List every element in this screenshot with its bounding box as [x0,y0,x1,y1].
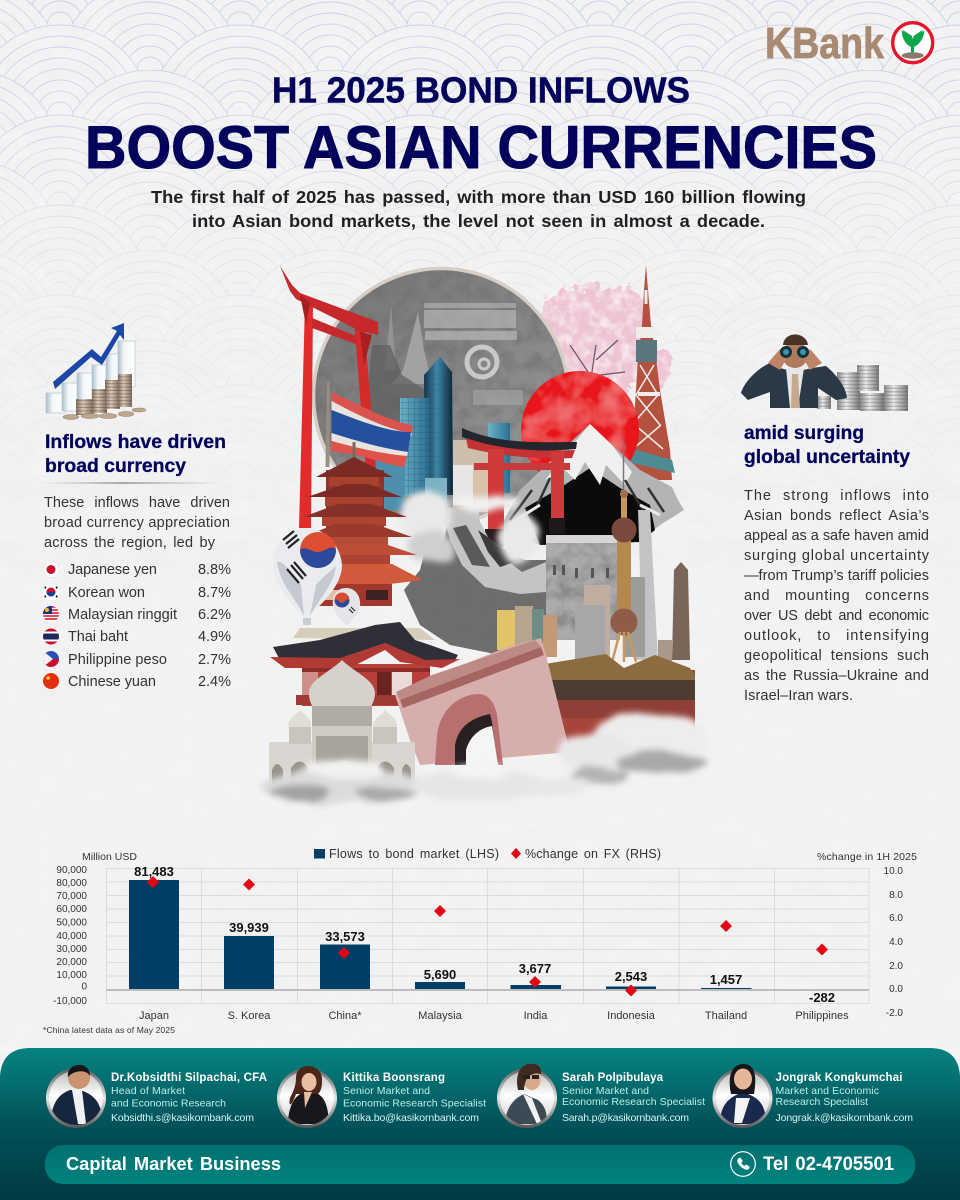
contact bar [45,1145,915,1184]
right axis labels: 2.0 [889,961,903,972]
heading: inflows have driven broad currency: Inflows have driven [45,431,226,453]
body text: as the Russia–Ukraine and [744,668,929,684]
bar value labels: 33,573 [325,929,365,944]
axis titles: Million USD [82,851,137,863]
bars: flows to bond market [129,880,847,991]
right axis labels: -2.0 [886,1008,903,1019]
item: Korean won: 8.7% [198,585,231,601]
contact: Kittika: Kittika.bo@kasikornbank.com [343,1112,479,1124]
left axis labels: -10,000 [53,996,87,1007]
Korean balloons [273,528,360,625]
category labels: China* [328,1010,362,1022]
category labels: Malaysia [418,1010,463,1022]
category labels: Philippines [795,1010,849,1022]
left axis labels [53,865,87,1007]
logo: KBank [765,19,933,68]
body text: across the region, led by [44,535,216,551]
left axis labels: 30,000 [56,944,87,955]
right axis labels: 4.0 [889,937,903,948]
category labels: Indonesia [607,1010,656,1022]
Thai flag [326,382,413,467]
small balloon [333,588,360,625]
item: Malaysian ringgit: 6.2% [198,607,231,623]
Taj Mahal [269,660,415,788]
logo wordmark: KBank [765,19,884,68]
icon: phone [731,1152,755,1176]
right axis labels: 8.0 [889,890,903,901]
label: Capital Market Business: Capital Market Business [66,1154,281,1174]
item: Thai baht [43,628,231,645]
body text: geopolitical tensions such [744,648,929,664]
item: Korean won: Korean won [68,585,145,601]
left axis labels: 70,000 [56,891,87,902]
Shanghai skyline [497,440,690,675]
collage: Asian landmarks [263,265,708,803]
body text [744,488,930,704]
bar value labels: 3,677 [519,961,551,976]
legend: Flows to bond market (LHS) [329,847,499,861]
body text: outlook, to intensifying [744,628,929,644]
body text: broad currency appreciation [44,515,230,531]
currency list [43,561,231,690]
Great Wall [404,506,620,655]
Tokyo tower [628,265,675,480]
left axis labels: 40,000 [56,931,87,942]
contact: Kittika: Kittika Boonsrang [343,1072,445,1084]
contact: Jongrak [712,1064,913,1128]
icon: businessman with binoculars and coins [741,334,908,411]
diamonds: FX percent change [147,876,828,996]
giant swing [280,266,378,528]
axis titles [82,851,917,863]
heading: inflows have driven broad currency: broad currency [45,455,186,477]
contact: Jongrak: Research Specialist [776,1096,868,1108]
left axis labels: 60,000 [56,904,87,915]
contact: Kobsidthi [46,1065,267,1128]
Mount Fuji [500,424,684,545]
bar value labels [134,864,835,1005]
left axis labels: 0 [81,982,87,992]
contact: Jongrak: Jongrak Kongkumchai [776,1072,902,1084]
body text [44,495,230,551]
contact: Kobsidthi: Dr.Kobsidthi Silpachai, CFA [111,1072,267,1084]
axis titles: %change in 1H 2025 [817,851,917,863]
title line 2: BOOST ASIAN CURRENCIES [85,114,877,181]
heading: amid surging [744,422,864,444]
contact: Kittika: Economic Research Specialist [343,1098,486,1110]
heading: inflows have driven broad currency [45,431,226,477]
panel: inflows and currency list [42,431,231,690]
subtitle: The first half of 2025 has passed, with more than USD 160 billion flowing [151,187,806,207]
item: Philippine peso [43,651,231,668]
category labels: Japan [139,1010,169,1022]
big balloon [273,528,342,625]
body text: appeal as a safe haven amid [744,528,929,544]
subtitle: into Asian bond markets, the level not seen in almost a decade. [192,211,765,231]
left axis labels: 90,000 [56,865,87,876]
legend: %change on FX (RHS) [525,847,661,861]
contact: Sarah: Sarah.p@kasikornbank.com [562,1112,689,1124]
label: telephone number: Tel 02-4705501 [763,1153,894,1175]
body text: —from Trump’s tariff policies [744,568,929,584]
body text: The strong inflows into [744,488,929,504]
heading [744,422,910,468]
body text: These inflows have driven [44,495,230,511]
bar value labels: 2,543 [615,969,647,984]
item: Philippine peso: 2.7% [198,652,231,668]
item: Malaysian ringgit: Malaysian ringgit [68,607,177,623]
contact: Jongrak: Jongrak.k@kasikornbank.com [776,1112,913,1124]
item: Japanese yen: Japanese yen [68,562,157,578]
item: Japanese yen [43,561,231,578]
item: Chinese yuan [43,673,231,690]
torii gate [462,428,577,547]
bar value labels: -282 [809,990,835,1005]
clouds around wall [399,492,538,562]
item: Thai baht: 4.9% [198,629,231,645]
category labels: Thailand [705,1010,747,1022]
body text: Israel–Iran wars. [744,688,853,704]
chart grid [106,868,869,1004]
Forbidden City [545,654,695,750]
left axis labels: 80,000 [56,878,87,889]
contact: Kittika [277,1066,486,1128]
body text: Asian bonds reflect Asia’s [744,508,929,524]
footnote: *China latest data as of May 2025 [43,1025,175,1035]
skyscrapers [375,357,510,512]
left axis labels: 10,000 [56,970,87,981]
item: Chinese yuan: 2.4% [198,674,231,690]
contact: Sarah: Sarah Polpibulaya [562,1072,664,1084]
category labels: S. Korea [228,1010,271,1022]
bar value labels: 81,483 [134,864,174,879]
category labels: India [524,1010,548,1022]
logo emblem: green leaves in red ring [893,23,933,63]
item: Korean won [43,584,231,601]
contact: Sarah: Economic Research Specialist [562,1096,705,1108]
item: Japanese yen: 8.8% [198,562,231,578]
left axis labels: 50,000 [56,918,87,928]
right axis labels [884,866,903,1019]
right axis labels: 6.0 [889,913,903,924]
category labels [139,1010,849,1022]
Korean palace [270,622,460,706]
panel: amid surging global uncertainty [744,422,930,704]
right axis labels: 10.0 [884,866,903,877]
body text: and mounting concerns [744,588,929,604]
contact: Kittika: Senior Market and [343,1085,430,1097]
cherry blossom tree [534,285,673,405]
contact: Sarah [497,1064,705,1128]
body text: surging global uncertainty [744,548,930,564]
coin [312,267,570,525]
contact: Kobsidthi: Head of Market [111,1085,185,1097]
title line 1: H1 2025 BOND INFLOWS [272,70,690,110]
combo chart: bond flows and FX change [43,847,917,1035]
bar value labels: 39,939 [229,920,269,935]
clouds [263,712,708,803]
pagoda [293,442,435,640]
left axis labels: 20,000 [56,957,87,968]
contact: Kobsidthi: Kobsidthi.s@kasikornbank.com [111,1112,254,1124]
legend [314,847,661,861]
item: Malaysian ringgit [43,606,231,623]
India Gate [395,638,570,765]
title [85,70,877,181]
subtitle [151,187,806,231]
contact: Sarah: Senior Market and [562,1085,649,1097]
item: Thai baht: Thai baht [68,629,128,645]
footer panel [0,1048,960,1200]
icon: rising chart with coins [46,323,146,420]
body text: over US debt and economic [744,608,929,624]
item: Philippine peso: Philippine peso [68,652,167,668]
item: Chinese yuan: Chinese yuan [68,674,156,690]
contact: Kobsidthi: and Economic Research [111,1098,226,1110]
right axis labels: 0.0 [889,984,903,995]
contact: Jongrak: Market and Economic [776,1085,879,1097]
bar value labels: 1,457 [710,972,742,987]
heading: global uncertainty [744,446,910,468]
bar value labels: 5,690 [424,967,456,982]
sun [521,371,639,489]
